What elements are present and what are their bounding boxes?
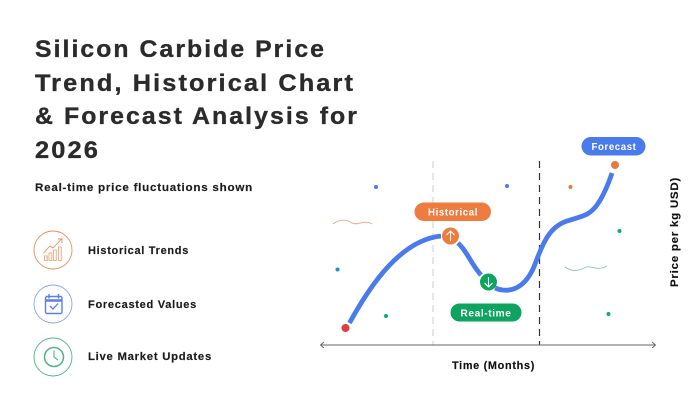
icon: live market updates: [34, 338, 72, 376]
marker: down arrow: [480, 274, 497, 290]
label: forecasted values: Forecasted Values: [88, 299, 197, 311]
title: Silicon Carbide Price: [35, 36, 326, 63]
title: 2026: [35, 137, 100, 164]
icon: forecasted values: [34, 285, 72, 323]
icon: historical trends: [34, 231, 72, 269]
badge: forecast: [582, 137, 646, 156]
scatter dots: [336, 184, 622, 318]
label: historical trends: Historical Trends: [88, 245, 189, 257]
y axis label: Price per kg USD): [669, 177, 681, 287]
badge: real-time: [450, 304, 522, 322]
x axis arrow: [320, 342, 656, 348]
price curve: historical: [350, 236, 441, 323]
badge: historical: [414, 202, 491, 221]
badge: real-time: Real-time: [460, 308, 512, 320]
price curve: decline: [458, 243, 481, 275]
subtitle: Real-time price fluctuations shown: [35, 182, 253, 194]
title: & Forecast Analysis for: [35, 103, 359, 130]
start point: [342, 324, 350, 332]
title: Trend, Historical Chart: [35, 70, 355, 97]
badge: forecast: Forecast: [592, 142, 637, 153]
feature list: [34, 231, 212, 376]
historical divider: [432, 161, 434, 345]
title: [35, 36, 359, 164]
label: live market updates: Live Market Updates: [88, 351, 212, 363]
orange squiggle: [333, 220, 372, 224]
end point: [611, 161, 619, 169]
badge: historical: Historical: [428, 208, 478, 218]
forecast divider: [538, 161, 540, 345]
chart: [320, 137, 681, 372]
green squiggle: [565, 266, 607, 270]
price curve: real-time and forecast: [495, 173, 612, 290]
x axis label: Time (Months): [452, 360, 535, 372]
marker: up arrow: [442, 228, 459, 244]
